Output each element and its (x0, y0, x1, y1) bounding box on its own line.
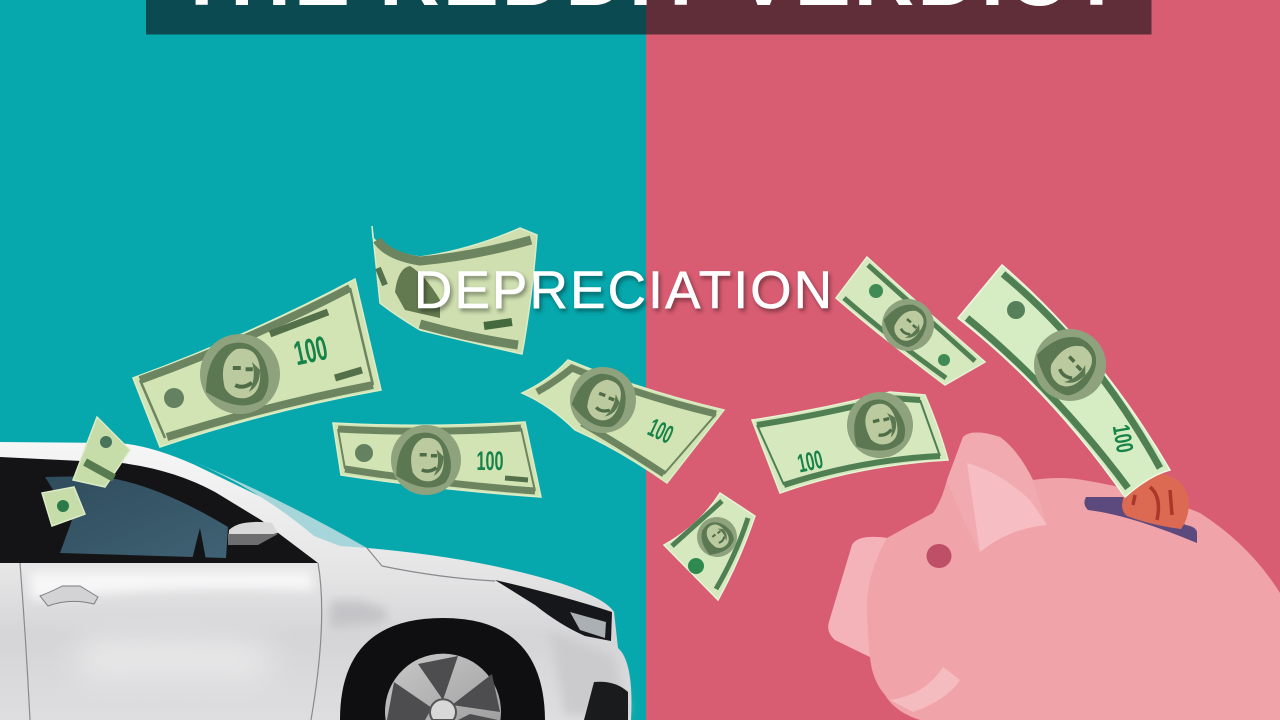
front wheel (340, 618, 545, 720)
coin slot (1084, 497, 1197, 543)
side window (0, 457, 318, 563)
headlight (495, 580, 612, 641)
cash bill: large upper left (133, 279, 381, 447)
pig eye (926, 544, 952, 568)
panel: teal left background (0, 0, 646, 720)
door seams (20, 548, 495, 720)
windshield strip (190, 460, 367, 548)
pig mouth (890, 667, 960, 712)
coin (1122, 473, 1189, 529)
cash bill: on car window (42, 487, 85, 526)
depreciation label: DEPRECIATION (414, 261, 832, 320)
cash bill: small lower center (664, 493, 755, 600)
denomination: 100 (644, 412, 678, 450)
door handle (40, 586, 98, 606)
cash bill: on car roof (73, 417, 130, 487)
inner ear (967, 463, 1047, 552)
ear (947, 432, 1047, 552)
cash bill: entering piggy bank (958, 265, 1170, 497)
denomination: 100 (476, 446, 504, 476)
illustration: piggy bank (828, 432, 1280, 720)
panel: pink right background (646, 0, 1280, 720)
window glass (45, 476, 228, 558)
front bumper vent (584, 682, 628, 720)
cash bill: right of divider (752, 385, 948, 493)
cash bill: center crossing divider (522, 358, 724, 483)
side mirror (228, 522, 278, 545)
denomination: 100 (1107, 423, 1138, 455)
title banner (146, 0, 1152, 34)
denomination: 100 (795, 444, 825, 478)
illustration: silver car (0, 442, 631, 720)
cash bill: lower middle (333, 422, 541, 497)
snout (828, 537, 887, 657)
cash bill: top, curled (372, 226, 537, 354)
pig body (828, 432, 1280, 720)
denomination: 100 (291, 329, 331, 373)
cash bill: upper right small (836, 257, 985, 385)
